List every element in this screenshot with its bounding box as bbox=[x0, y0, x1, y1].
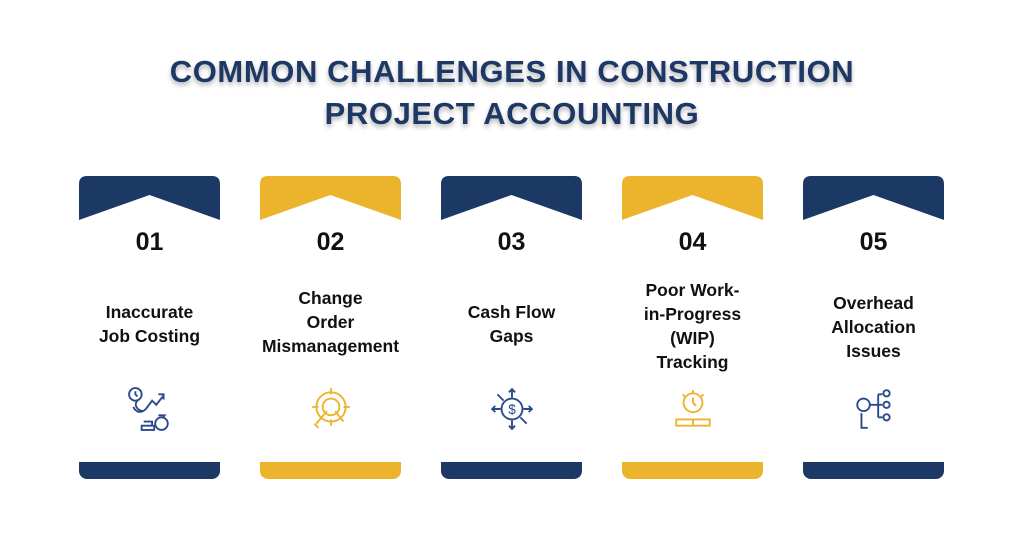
number 04: 04 bbox=[679, 228, 706, 256]
text 05 bbox=[831, 293, 916, 361]
bottom bar bbox=[79, 462, 220, 479]
text 05: Issues bbox=[846, 341, 901, 361]
text 01: Inaccurate bbox=[106, 302, 193, 322]
icon: cash flow bbox=[490, 388, 534, 430]
text 04 bbox=[644, 280, 741, 372]
number 01: 01 bbox=[136, 228, 163, 256]
icon: allocation bbox=[856, 389, 891, 429]
text 01 bbox=[99, 302, 200, 346]
text 03: Gaps bbox=[490, 326, 533, 346]
card 04 bbox=[622, 176, 763, 479]
text 02: Order bbox=[307, 312, 354, 332]
title bbox=[168, 54, 854, 131]
card 05 bbox=[803, 176, 944, 479]
icon: cash flow: $ bbox=[508, 402, 516, 417]
bottom bar bbox=[803, 462, 944, 479]
text 01: Job Costing bbox=[99, 326, 200, 346]
title: COMMON CHALLENGES IN CONSTRUCTION bbox=[170, 54, 854, 89]
title: PROJECT ACCOUNTING bbox=[325, 96, 699, 131]
text 03 bbox=[468, 302, 556, 346]
bottom bar bbox=[260, 462, 401, 479]
number 03: 03 bbox=[498, 228, 525, 256]
icon: job costing bbox=[128, 387, 169, 431]
text 04: Poor Work- bbox=[646, 280, 740, 300]
text 04: in-Progress bbox=[644, 304, 741, 324]
icon: WIP bbox=[675, 390, 711, 427]
text 04: (WIP) bbox=[670, 328, 715, 348]
card 01 bbox=[79, 176, 220, 479]
text 04: Tracking bbox=[656, 352, 728, 372]
bottom bar bbox=[441, 462, 582, 479]
text 02: Change bbox=[298, 288, 363, 308]
text 02: Mismanagement bbox=[262, 336, 399, 356]
text 03: Cash Flow bbox=[468, 302, 555, 322]
text 05: Overhead bbox=[833, 293, 914, 313]
number 02: 02 bbox=[317, 228, 344, 256]
text 05: Allocation bbox=[831, 317, 916, 337]
bottom bar bbox=[622, 462, 763, 479]
text 02 bbox=[262, 288, 399, 356]
card 02 bbox=[260, 176, 401, 479]
card 03 bbox=[441, 176, 582, 479]
number 05: 05 bbox=[860, 228, 887, 256]
icon: target bbox=[312, 388, 350, 428]
